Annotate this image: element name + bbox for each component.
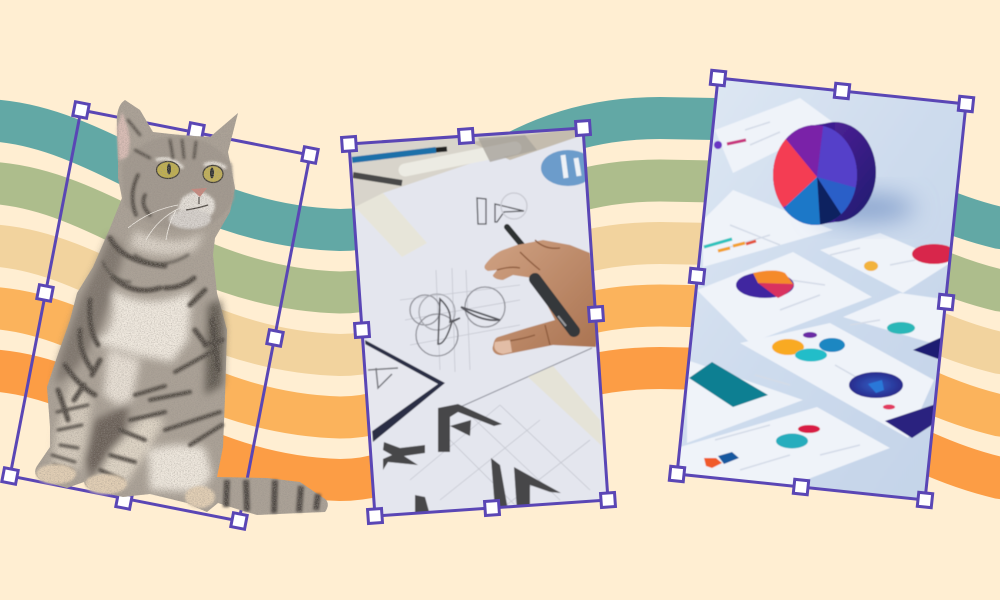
pen tip above hand — [507, 227, 522, 245]
pen in hand — [535, 279, 574, 331]
hand with fingers — [484, 240, 598, 355]
round chart on card — [736, 270, 794, 298]
sketch photo selection frame — [342, 121, 615, 523]
white marker — [405, 148, 515, 170]
cat tail stripes — [226, 480, 318, 513]
blue disc — [849, 372, 903, 398]
cat nose and mouth — [186, 188, 208, 210]
cat dark gap between legs — [85, 405, 128, 480]
small gauge — [864, 261, 878, 271]
cat markings — [52, 120, 222, 480]
desk surface — [351, 131, 561, 210]
cat front legs — [52, 380, 92, 470]
dark chip right — [913, 337, 942, 360]
dark pen — [353, 175, 402, 183]
small red mark — [883, 404, 895, 410]
card text lines — [715, 122, 915, 470]
cat chest — [92, 290, 192, 362]
tape right — [528, 366, 602, 446]
blue circle logo — [540, 150, 586, 186]
chart photo selection frame — [669, 70, 974, 508]
cat face — [122, 136, 234, 230]
teal panel — [689, 362, 768, 407]
dashboard cards — [680, 98, 950, 487]
notebook — [365, 340, 445, 442]
paper base — [349, 128, 608, 516]
bubble cluster — [772, 332, 845, 362]
tape left — [355, 193, 427, 257]
cat ear inner — [117, 112, 130, 160]
construction grid lines — [400, 268, 590, 510]
teal blob — [887, 322, 915, 334]
red dome chart — [912, 244, 956, 264]
pie shadow — [815, 194, 915, 222]
top logo sketch — [477, 193, 527, 224]
wavy retro stripes — [0, 114, 1000, 486]
cat eyes — [156, 162, 223, 182]
top left bars — [714, 140, 746, 149]
cat paws — [36, 464, 215, 508]
cat body shading — [55, 235, 125, 385]
grey clip — [478, 135, 537, 162]
dark panel — [885, 404, 936, 438]
cat selection frame — [2, 102, 318, 529]
panel: tabby cat photo cut-out — [35, 100, 328, 515]
panel: logo sketching photo — [349, 128, 608, 516]
bottom charts — [704, 425, 820, 468]
panel: data charts photo — [677, 78, 966, 500]
blue backdrop — [677, 78, 966, 500]
cat belly — [148, 444, 212, 492]
cat whiskers — [128, 205, 180, 240]
cat silhouette — [35, 100, 328, 515]
3D pie chart — [772, 121, 876, 226]
colored bars — [704, 239, 756, 251]
paper edge — [458, 348, 592, 408]
blue pen — [352, 149, 447, 160]
dark logo marks — [383, 404, 561, 516]
middle logo sketch — [410, 287, 505, 356]
